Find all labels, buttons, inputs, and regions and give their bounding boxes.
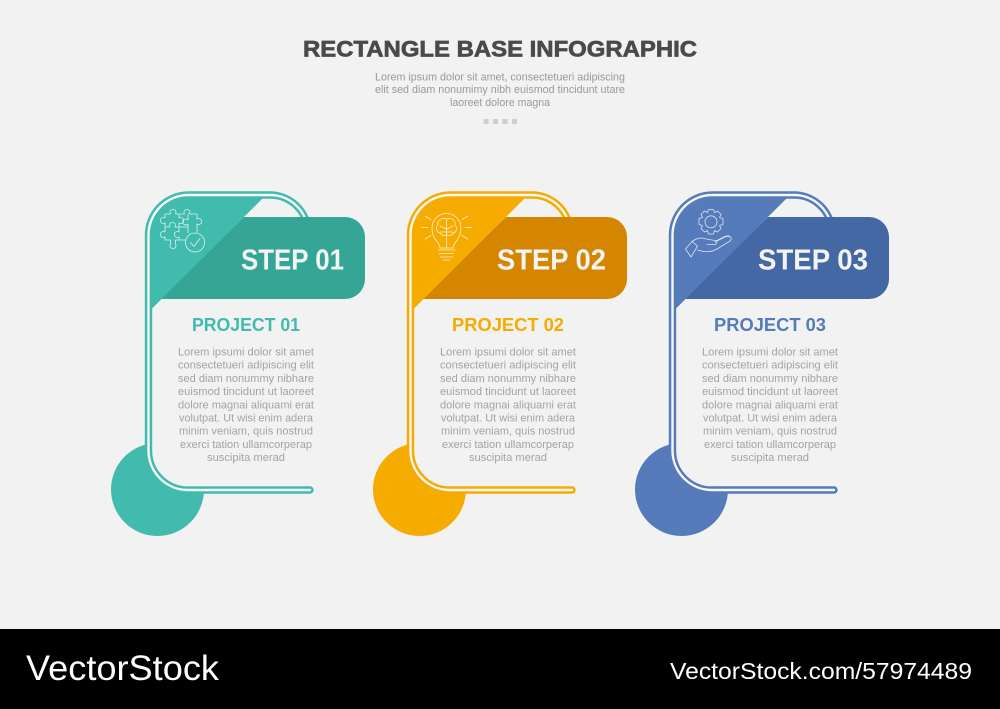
project heading: PROJECT 03	[714, 315, 826, 335]
body text: sed diam nonummy nibhare	[702, 373, 838, 385]
step banner	[422, 217, 627, 299]
body text: Lorem ipsumi dolor sit amet	[178, 346, 314, 358]
corner triangle	[674, 198, 787, 310]
card outline inner	[410, 195, 572, 490]
panel: step 01	[111, 195, 365, 536]
corner triangle	[150, 198, 263, 310]
footer logo: VectorStock	[26, 649, 220, 688]
body text: dolore magnai aliquami erat	[702, 399, 838, 411]
body text: consectetueri adipiscing elit	[440, 360, 576, 372]
corner triangle	[412, 198, 525, 310]
body text: consectetueri adipiscing elit	[178, 360, 314, 372]
body text: suscipita merad	[731, 452, 809, 464]
body text	[702, 346, 838, 464]
body text: minim veniam, quis nostrud	[703, 426, 837, 438]
body text	[178, 346, 314, 464]
project heading: PROJECT 01	[192, 315, 300, 335]
subtitle text: Lorem ipsum dolor sit amet, consectetueri adipiscing	[375, 72, 625, 84]
card outline inner	[672, 195, 834, 490]
subtitle text: elit sed diam nonumimy nibh euismod tincidunt utare	[375, 84, 625, 96]
body text: dolore magnai aliquami erat	[178, 399, 314, 411]
subtitle text	[375, 72, 625, 109]
body text: volutpat. Ut wisi enim adera	[703, 412, 838, 424]
step label: STEP 02	[497, 244, 606, 276]
divider dots	[484, 119, 517, 124]
body text: minim veniam, quis nostrud	[179, 426, 313, 438]
body text: Lorem ipsumi dolor sit amet	[702, 346, 838, 358]
project heading: PROJECT 02	[452, 315, 564, 335]
body text	[440, 346, 576, 464]
icon: light bulb with brain	[421, 214, 472, 260]
body text: volutpat. Ut wisi enim adera	[179, 412, 314, 424]
body text: euismod tincidunt ut laoreet	[702, 386, 838, 398]
step label: STEP 03	[758, 244, 868, 276]
body text: exerci tation ullamcorperap	[704, 439, 836, 451]
body text: minim veniam, quis nostrud	[441, 426, 575, 438]
card outline	[148, 195, 310, 490]
card interior	[148, 195, 310, 490]
body text: euismod tincidunt ut laoreet	[440, 386, 576, 398]
card outline	[672, 195, 834, 490]
body text: suscipita merad	[469, 452, 547, 464]
body text: exerci tation ullamcorperap	[442, 439, 574, 451]
body text: consectetueri adipiscing elit	[702, 360, 838, 372]
icon: hand holding gear	[686, 210, 731, 257]
body text: dolore magnai aliquami erat	[440, 399, 576, 411]
subtitle text: laoreet dolore magna	[450, 97, 551, 109]
body text: volutpat. Ut wisi enim adera	[441, 412, 576, 424]
panel: step 02	[373, 195, 627, 536]
corner circle	[373, 443, 466, 536]
body text: sed diam nonummy nibhare	[178, 373, 314, 385]
panel: step 03	[635, 195, 889, 536]
body text: euismod tincidunt ut laoreet	[178, 386, 314, 398]
body text: exerci tation ullamcorperap	[180, 439, 312, 451]
body text: suscipita merad	[207, 452, 285, 464]
card outline	[410, 195, 572, 490]
corner circle	[635, 443, 728, 536]
footer url: VectorStock.com/57974489	[670, 658, 972, 684]
body text: Lorem ipsumi dolor sit amet	[440, 346, 576, 358]
footer bar	[0, 629, 1000, 709]
body text: sed diam nonummy nibhare	[440, 373, 576, 385]
corner circle	[111, 443, 204, 536]
icon: puzzle with check	[160, 209, 204, 252]
card interior	[410, 195, 572, 490]
card interior	[672, 195, 834, 490]
step banner	[160, 217, 365, 299]
title: RECTANGLE BASE INFOGRAPHIC	[303, 36, 697, 62]
step banner	[684, 217, 889, 299]
card outline inner	[148, 195, 310, 490]
step label: STEP 01	[241, 244, 344, 276]
